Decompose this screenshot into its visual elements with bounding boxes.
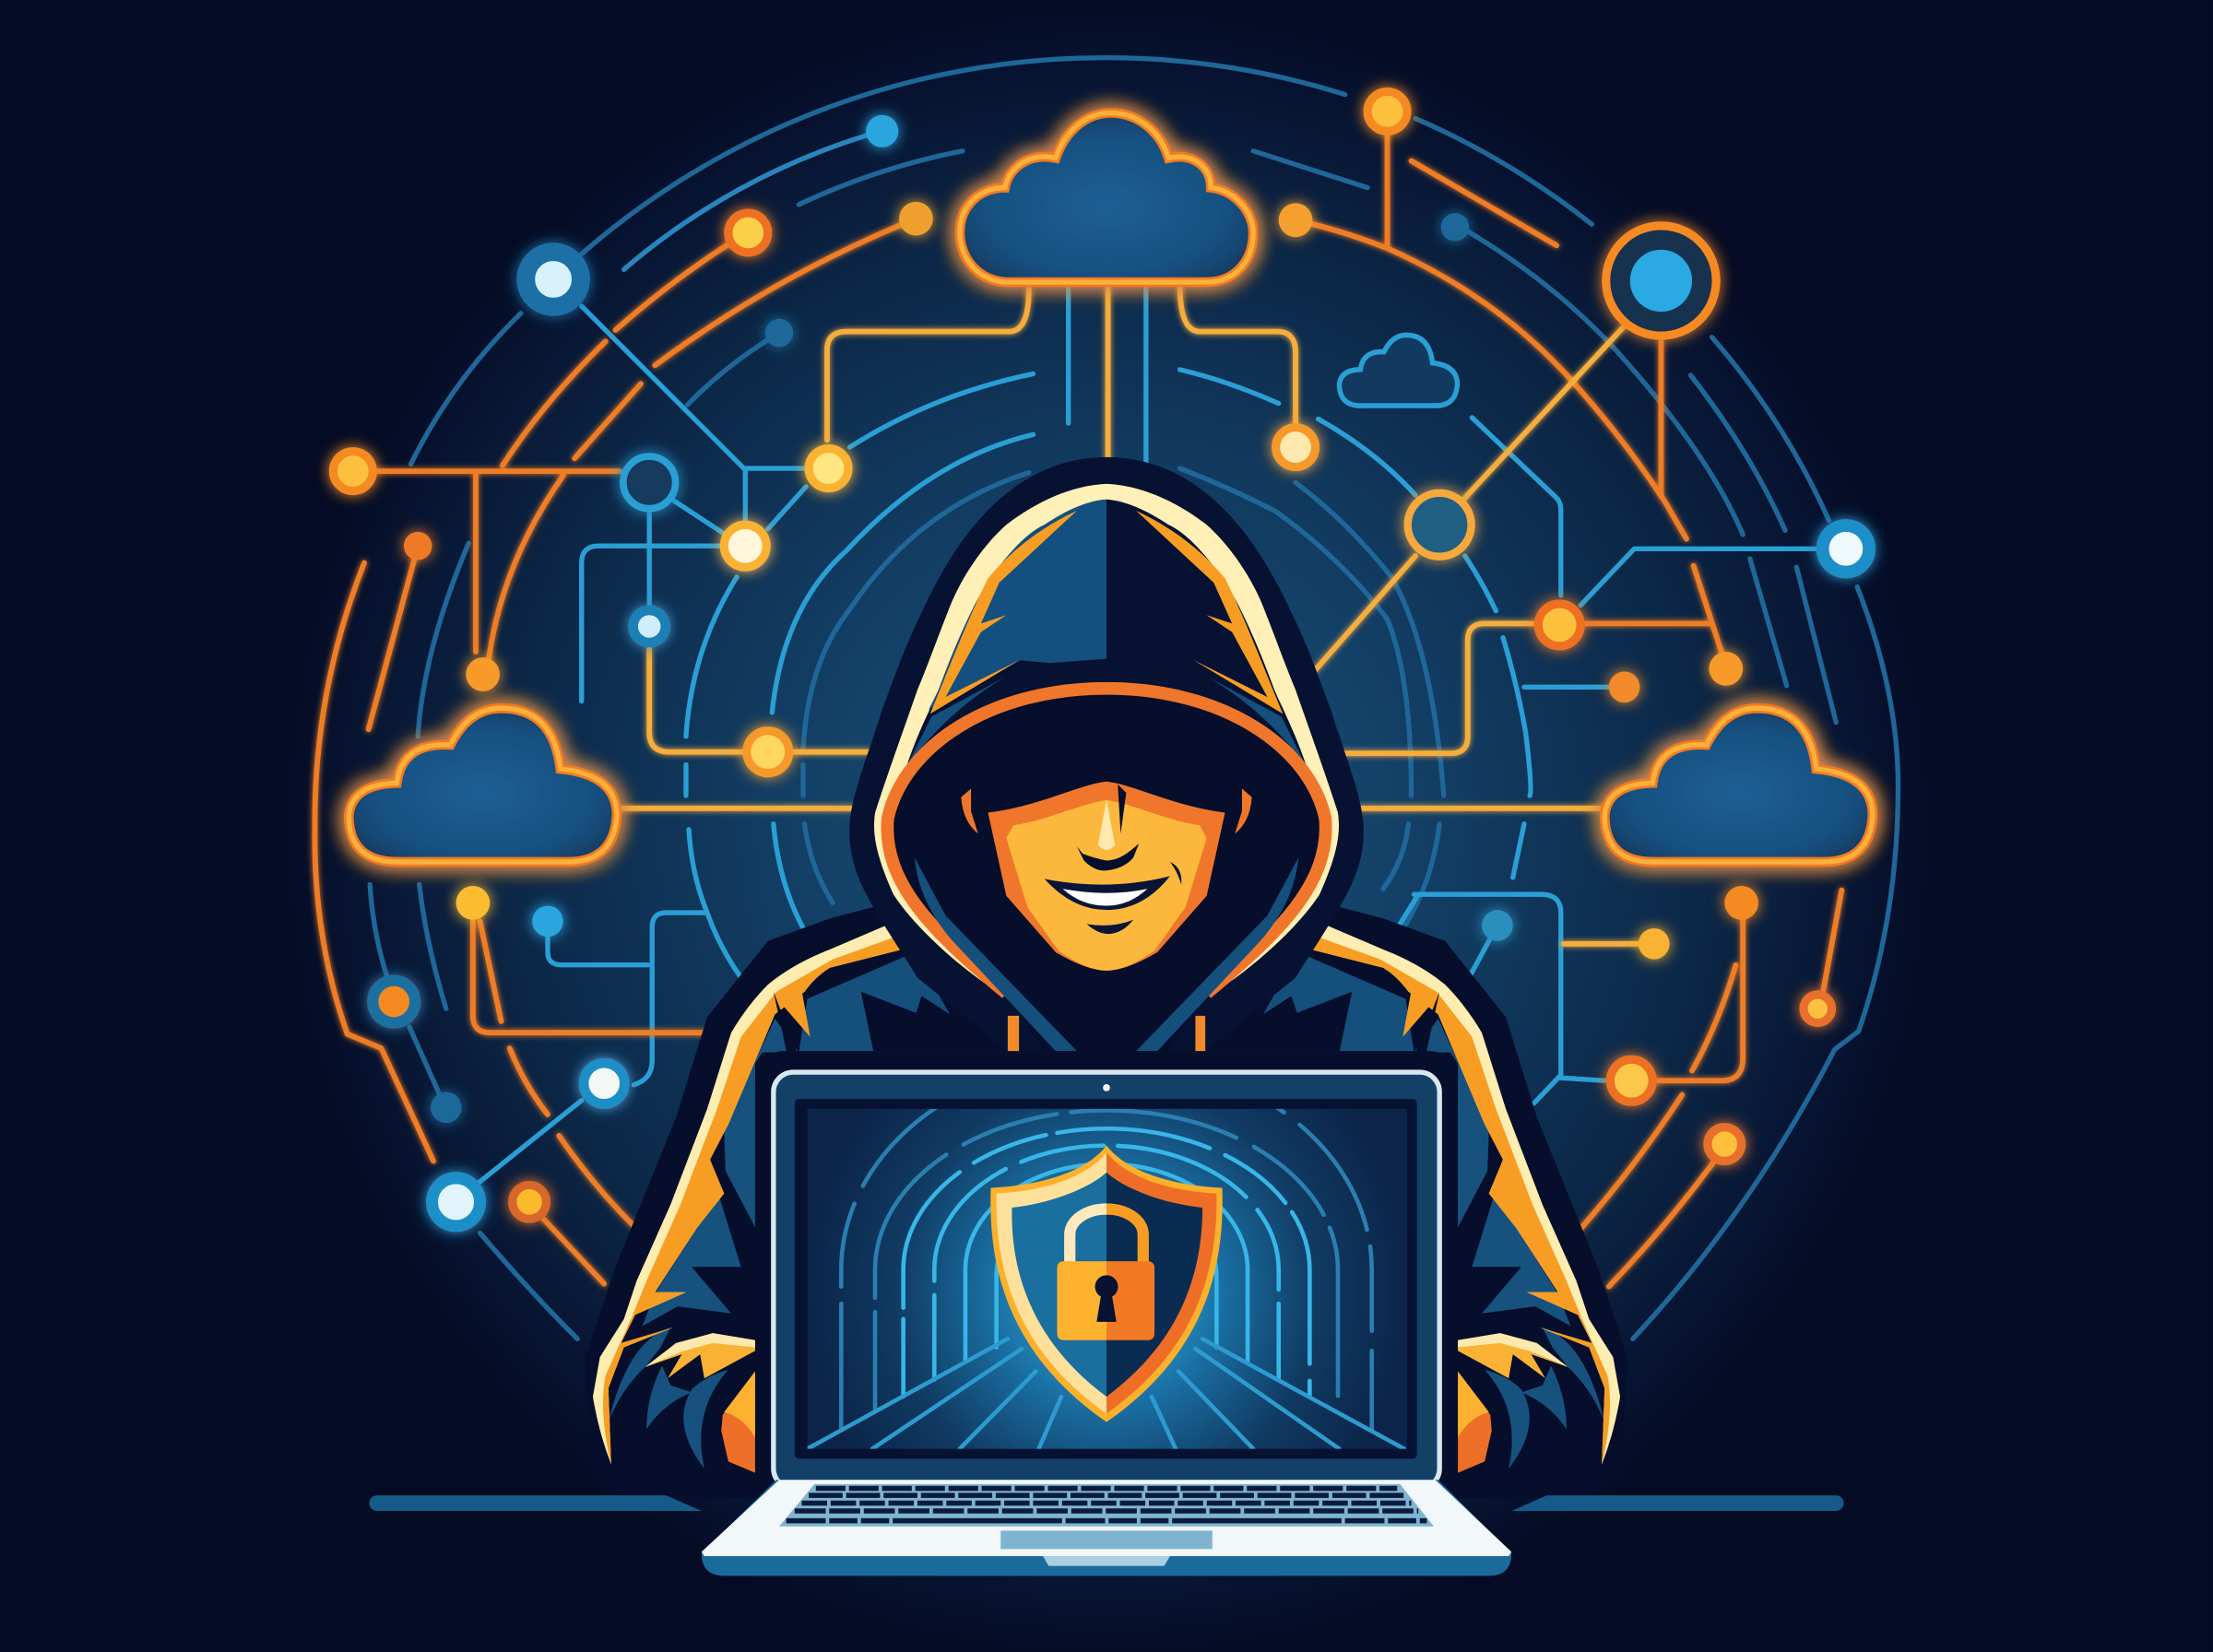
dim blue circuit arcs bbox=[370, 58, 1899, 1339]
webcam bbox=[1103, 1084, 1110, 1092]
screen bezel bbox=[795, 1099, 1417, 1458]
hood left flame bbox=[930, 511, 1077, 714]
floor lines bbox=[369, 1495, 1844, 1511]
shield bbox=[990, 1146, 1223, 1422]
laptop lid bbox=[774, 1072, 1439, 1488]
left arm bbox=[585, 903, 1106, 1498]
orange and yellow nodes bbox=[333, 91, 1832, 1219]
shield left band bbox=[997, 1152, 1106, 1413]
teeth bbox=[1063, 889, 1147, 905]
nose shadow bbox=[1077, 785, 1139, 870]
screen bbox=[808, 1109, 1407, 1449]
hood left panel bbox=[929, 500, 1106, 710]
tunnel graphic bbox=[808, 1108, 1407, 1449]
small blue cloud bbox=[1340, 335, 1457, 406]
hood strings bbox=[1008, 1016, 1205, 1054]
blue and white nodes bbox=[431, 115, 1869, 1226]
orange circuit lines bbox=[314, 112, 1841, 1287]
padlock bbox=[1057, 1209, 1154, 1340]
bright blue circuit lines bbox=[476, 136, 1817, 1185]
keyboard bbox=[779, 1484, 1434, 1527]
laptop base bbox=[702, 1480, 1511, 1575]
mouth bbox=[1045, 876, 1170, 910]
dimple and lip bbox=[1087, 862, 1181, 934]
shield outer edge bbox=[990, 1146, 1223, 1422]
laptop surround bbox=[755, 1051, 1458, 1495]
hacker figure bbox=[585, 457, 1628, 1498]
hood silhouette bbox=[849, 457, 1364, 1058]
face bbox=[961, 782, 1252, 971]
hood cream outline bbox=[874, 484, 1339, 997]
laptop deck bbox=[702, 1480, 1511, 1556]
hood right flame bbox=[1136, 511, 1283, 714]
illustration: hooded hacker with laptop and cloud network bbox=[307, 44, 1901, 1621]
hood side slivers bbox=[906, 678, 1307, 767]
right arm bbox=[1106, 903, 1628, 1498]
ring nodes bbox=[373, 226, 1716, 1022]
face skin bbox=[1006, 800, 1207, 971]
background glow disc bbox=[276, 0, 1940, 1652]
shackle bbox=[1070, 1209, 1106, 1264]
lock body left bbox=[1057, 1261, 1106, 1340]
top cloud bbox=[960, 112, 1253, 282]
laptop bbox=[702, 1051, 1511, 1575]
face shade bbox=[988, 782, 1225, 971]
ears bbox=[961, 788, 1252, 833]
collar blue strips bbox=[915, 857, 1077, 1051]
trackpad bbox=[1000, 1530, 1213, 1549]
yellow circuit lines bbox=[617, 282, 1654, 944]
shield inner left bbox=[1012, 1173, 1106, 1397]
hood opening bbox=[887, 683, 1326, 1051]
hood rim bbox=[887, 689, 1326, 993]
nose bbox=[1098, 800, 1115, 850]
left cloud bbox=[349, 708, 617, 862]
shield inner right bbox=[1106, 1173, 1202, 1397]
right cloud bbox=[1604, 708, 1873, 862]
laptop notch bbox=[1043, 1556, 1170, 1566]
keyhole bbox=[1095, 1275, 1118, 1322]
lock body right bbox=[1106, 1261, 1154, 1340]
shield right band bbox=[1106, 1152, 1216, 1413]
